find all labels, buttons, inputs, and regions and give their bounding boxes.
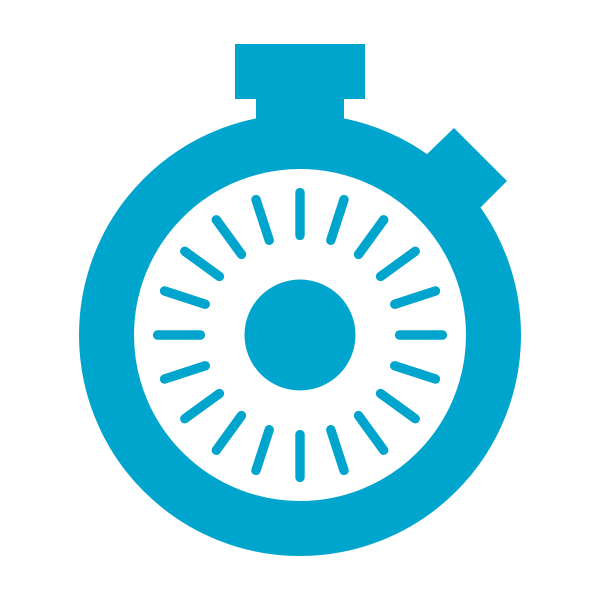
- side button: [424, 128, 507, 210]
- watch ring: [106, 142, 494, 528]
- top crown button: [235, 44, 365, 138]
- centre hub: [244, 280, 356, 390]
- dial tick marks: [158, 193, 442, 477]
